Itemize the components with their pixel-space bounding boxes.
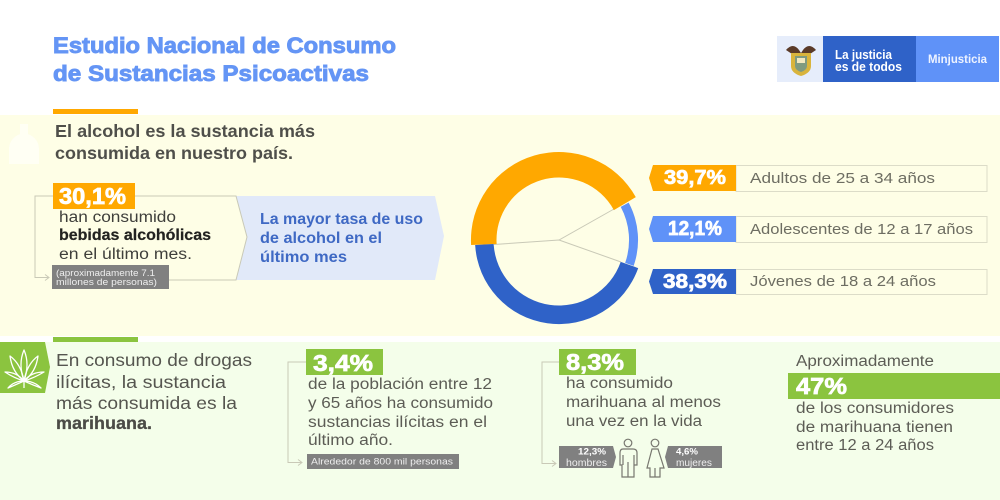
callout: 8,3% lifetime use — [542, 349, 722, 477]
tag: men 12,3% — [559, 446, 616, 469]
panel: alcohol background — [0, 115, 1000, 336]
accent bar: drugs — [53, 337, 138, 342]
legend row: adults 39,7%: 39,7% — [664, 167, 726, 189]
callout: 8,3% lifetime use: una vez en la vida — [566, 413, 702, 430]
legend row: adolescents 12,1%: Adolescentes de 12 a 17 años — [750, 221, 973, 238]
callout: 3,4% population — [288, 349, 493, 469]
chevron: highest alcohol use rate: La mayor tasa de uso — [260, 211, 423, 228]
legend row: adolescents 12,1% — [649, 216, 987, 242]
chevron: highest alcohol use rate: de alcohol en el — [260, 230, 382, 247]
tag: women 4,6%: 4,6% — [676, 446, 699, 458]
icon: man — [620, 439, 637, 477]
heading: illicit drugs: más consumida es la — [56, 393, 237, 413]
tag: men 12,3%: hombres — [566, 457, 607, 469]
callout: 3,4% population: último año. — [308, 432, 393, 449]
callout: 3,4% population: de la población entre 12 — [308, 376, 492, 393]
callout: 3,4% population: y 65 años ha consumido — [308, 395, 493, 412]
callout: 8,3% lifetime use: marihuana al menos — [566, 394, 721, 411]
title: Estudio Nacional de Consumo — [53, 33, 396, 58]
icon: woman — [647, 439, 664, 477]
logo: Minjusticia: La justicia — [835, 47, 893, 62]
callout: 3,4% population: sustancias ilícitas en el — [308, 414, 487, 431]
heading: illicit drugs: ilícitas, la sustancia — [56, 372, 226, 392]
note: 7.1 million people — [52, 265, 169, 289]
icon: cannabis leaf — [0, 342, 50, 393]
heading: illicit drugs: marihuana. — [56, 413, 152, 433]
icon: faint alcohol bottle — [9, 124, 39, 164]
tag: women 4,6% — [665, 446, 722, 469]
logo: Minjusticia: es de todos — [835, 59, 902, 74]
callout: 47% consumers: entre 12 a 24 años — [796, 437, 934, 454]
note: 7.1 million people: millones de personas) — [56, 277, 157, 288]
donut chart — [471, 152, 638, 324]
tag: women 4,6%: mujeres — [676, 457, 712, 469]
callout: 30,1% alcohol: en el último mes. — [59, 246, 192, 263]
callout: 47% consumers: 47% — [796, 373, 847, 399]
chevron: highest alcohol use rate — [236, 196, 444, 280]
callout: 30,1% alcohol: 30,1% — [59, 183, 126, 209]
heading: alcohol: consumida en nuestro país. — [55, 143, 293, 163]
heading: alcohol — [55, 121, 315, 163]
callout: 8,3% lifetime use: 8,3% — [566, 349, 624, 375]
title: de Sustancias Psicoactivas — [53, 61, 369, 86]
heading: alcohol: El alcohol es la sustancia más — [55, 121, 315, 141]
note: 7.1 million people: (aproximadamente 7.1 — [56, 268, 155, 279]
callout: 47% consumers — [788, 353, 1000, 454]
chevron: highest alcohol use rate: último mes — [260, 249, 347, 266]
title — [53, 33, 396, 86]
legend row: adults 39,7%: Adultos de 25 a 34 años — [750, 170, 935, 187]
callout: 30,1% alcohol — [35, 183, 247, 289]
callout: 47% consumers: de marihuana tienen — [796, 419, 953, 436]
panel: illicit drugs background — [0, 342, 1000, 500]
legend row: youth 38,3%: 38,3% — [663, 271, 727, 293]
heading: illicit drugs: En consumo de drogas — [56, 350, 252, 370]
callout: 30,1% alcohol: bebidas alcohólicas — [59, 227, 211, 244]
legend row: youth 38,3%: Jóvenes de 18 a 24 años — [750, 273, 936, 290]
callout: 8,3% lifetime use: ha consumido — [566, 375, 673, 392]
logo: Minjusticia — [777, 36, 999, 82]
callout: 47% consumers: Aproximadamente — [796, 353, 934, 370]
heading: illicit drugs — [56, 350, 252, 433]
icon: coat of arms — [786, 46, 816, 76]
accent bar: alcohol — [53, 109, 138, 114]
tag: men 12,3%: 12,3% — [578, 446, 607, 458]
note: 800 thousand people: Alrededor de 800 mil personas — [311, 456, 453, 468]
legend row: adolescents 12,1%: 12,1% — [668, 218, 722, 240]
legend row: adults 39,7% — [649, 165, 987, 192]
callout: 3,4% population: 3,4% — [313, 350, 373, 376]
callout: 47% consumers: de los consumidores — [796, 400, 954, 417]
callout: 30,1% alcohol: han consumido — [59, 209, 176, 226]
logo: Minjusticia: Minjusticia — [928, 52, 987, 66]
legend row: youth 38,3% — [649, 269, 987, 294]
note: 800 thousand people — [307, 454, 459, 469]
